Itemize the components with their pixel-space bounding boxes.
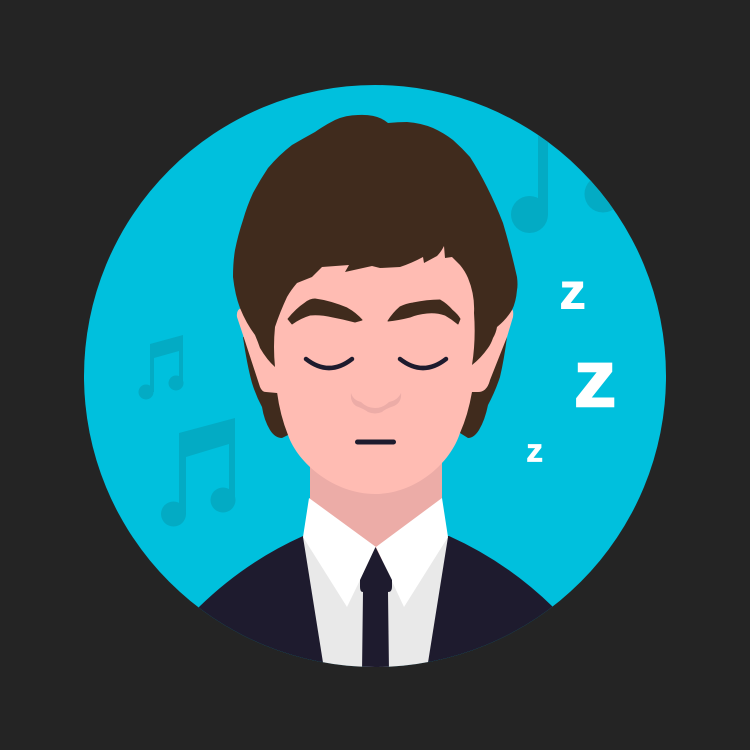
- portrait illustration: [84, 85, 666, 667]
- left collar: [303, 498, 376, 607]
- jacket: [198, 536, 552, 667]
- icon: large music note left: [161, 418, 236, 526]
- icon: music note top right: [511, 135, 614, 233]
- face: [272, 235, 476, 494]
- right eyebrow: [388, 300, 460, 324]
- icon: small music note left: [138, 335, 184, 400]
- right eye: [400, 359, 446, 368]
- snore letter medium: z: [560, 264, 586, 319]
- right collar: [376, 498, 448, 607]
- tie: [360, 547, 392, 672]
- snore letter large: z: [574, 332, 617, 424]
- cyan circle: [84, 85, 666, 667]
- snore letter small: z: [526, 432, 543, 469]
- mouth: [355, 440, 396, 444]
- left eyebrow: [288, 299, 362, 324]
- shirt: [303, 537, 448, 672]
- left eye: [306, 359, 352, 368]
- left ear: [236, 308, 278, 393]
- back hair: [243, 337, 507, 438]
- neck: [310, 463, 442, 560]
- nose: [351, 393, 401, 414]
- clipped scene: [138, 115, 622, 680]
- hair: [233, 115, 518, 367]
- right ear: [476, 310, 514, 392]
